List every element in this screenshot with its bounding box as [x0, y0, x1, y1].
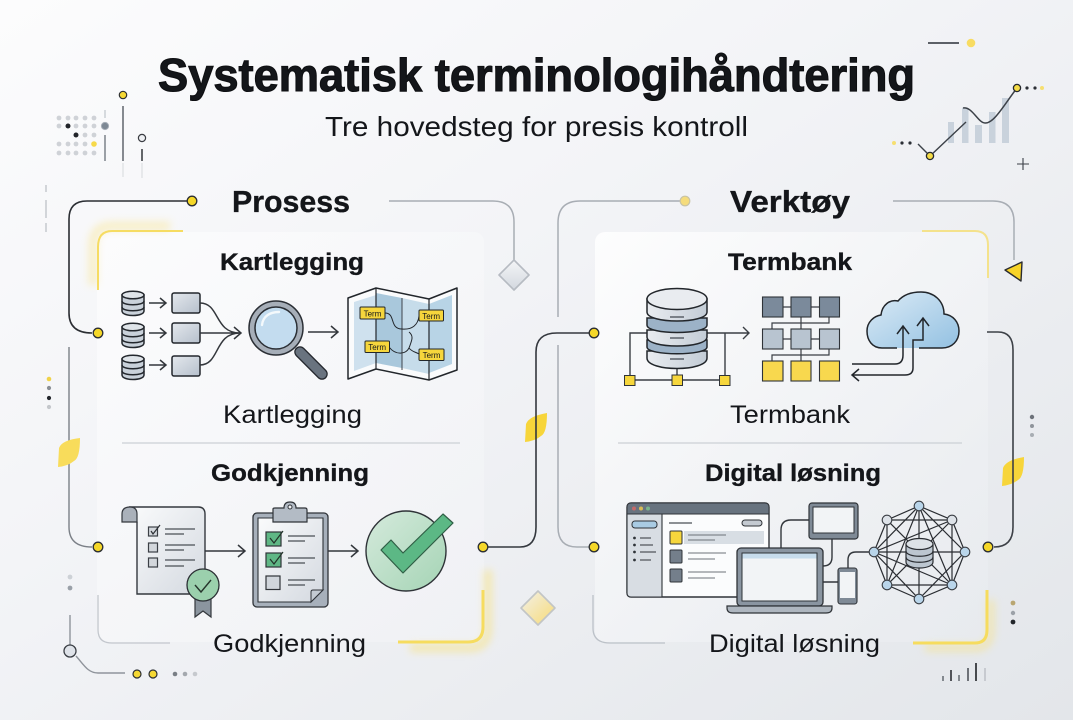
connector: Godkjenning to Termbank: [478, 328, 599, 552]
bracket: Godkjenning lower-left: [98, 595, 170, 643]
decoration: lower-right bars: [943, 663, 985, 681]
heading: Termbank: Termbank: [728, 249, 852, 276]
icon group: devices and network: [627, 501, 970, 613]
heading: Kartlegging: Kartlegging: [220, 249, 364, 276]
yellow corner accent: Godkjenning lower-right: [398, 570, 488, 648]
heading: Digital løsning: Digital løsning: [705, 460, 881, 487]
icon: cloud with sync arrows: [852, 292, 959, 381]
heading: Prosess: Prosess: [232, 184, 350, 219]
icon group: data sources to magnifier to map: [122, 288, 457, 380]
arrow: clipboard to check: [328, 545, 358, 557]
connector: Verktøy to triangle: [893, 201, 1014, 260]
connector: Verktøy to Termbank: [558, 196, 690, 317]
arrow: document to clipboard: [205, 545, 245, 557]
icon: termbank database: [624, 288, 749, 386]
yellow corner accent: Verktøy top-right: [922, 231, 988, 278]
yellow corner accent: Digital løsning lower-right: [913, 590, 991, 648]
icon: term map: Term: [368, 343, 386, 352]
panel: Prosess: [97, 232, 484, 642]
icon: clipboard: [253, 502, 328, 607]
bracket: Digital løsning lower-left: [593, 595, 665, 643]
connector: left lower line to Godkjenning: [69, 347, 103, 552]
icon group: document to clipboard to check: [122, 502, 453, 617]
title: Systematisk terminologihåndtering: [158, 49, 915, 101]
decoration: top-left dots and pins: [57, 91, 146, 178]
decoration: top-right trend chart: [892, 39, 1044, 170]
decoration: lower-left node and dots: [64, 615, 197, 678]
icon: network with database: [869, 501, 970, 604]
decoration: right dots: [1011, 415, 1034, 624]
panel: Verktøy: [595, 232, 988, 642]
icon: approved check: [366, 511, 453, 591]
diamond: yellow: [521, 591, 555, 625]
connector: centre lower line to Digital løsning: [558, 345, 599, 552]
yellow leaf: right: [1002, 457, 1024, 486]
icon: source databases: [122, 291, 144, 380]
icon: laptop: [727, 548, 832, 613]
heading: Verktøy: Verktøy: [730, 184, 851, 219]
diamond: grey: [499, 260, 529, 290]
heading: Godkjenning: Godkjenning: [211, 460, 369, 487]
yellow corner accent: Prosess top-left: [93, 226, 183, 290]
connector: Prosess to diamond: [389, 201, 514, 260]
icon: phone: [838, 568, 857, 604]
triangle marker: [1005, 262, 1022, 281]
arrow: magnifier to map: [308, 326, 338, 338]
icon group: database to grid to cloud: [624, 288, 959, 386]
icon: term map: Term: [422, 312, 440, 321]
connector: Prosess to Kartlegging: [69, 196, 197, 338]
label: Digital løsning: Digital løsning: [709, 630, 880, 658]
connectors: devices: [781, 520, 874, 582]
icon: tablet: [809, 503, 858, 539]
label: Termbank: Termbank: [730, 401, 851, 429]
icon: source arrows and boxes: [149, 293, 241, 376]
icon: term map: Term: [423, 351, 441, 360]
subtitle: Tre hovedsteg for presis kontroll: [325, 111, 748, 142]
icon: term map: Term: [364, 310, 382, 318]
decoration: left side dashes and dots: [46, 185, 72, 590]
icon: certificate document: [122, 507, 219, 617]
label: Kartlegging: Kartlegging: [223, 401, 362, 429]
icon: magnifier: [249, 301, 322, 374]
connector: Termbank to Digital løsning right: [983, 332, 1013, 552]
icon: app window: [627, 503, 769, 597]
icon: term grid: [762, 297, 840, 381]
icon: term map: [348, 288, 457, 380]
yellow leaf: centre: [525, 413, 547, 442]
yellow leaf: left: [58, 438, 80, 467]
label: Godkjenning: Godkjenning: [213, 630, 366, 658]
